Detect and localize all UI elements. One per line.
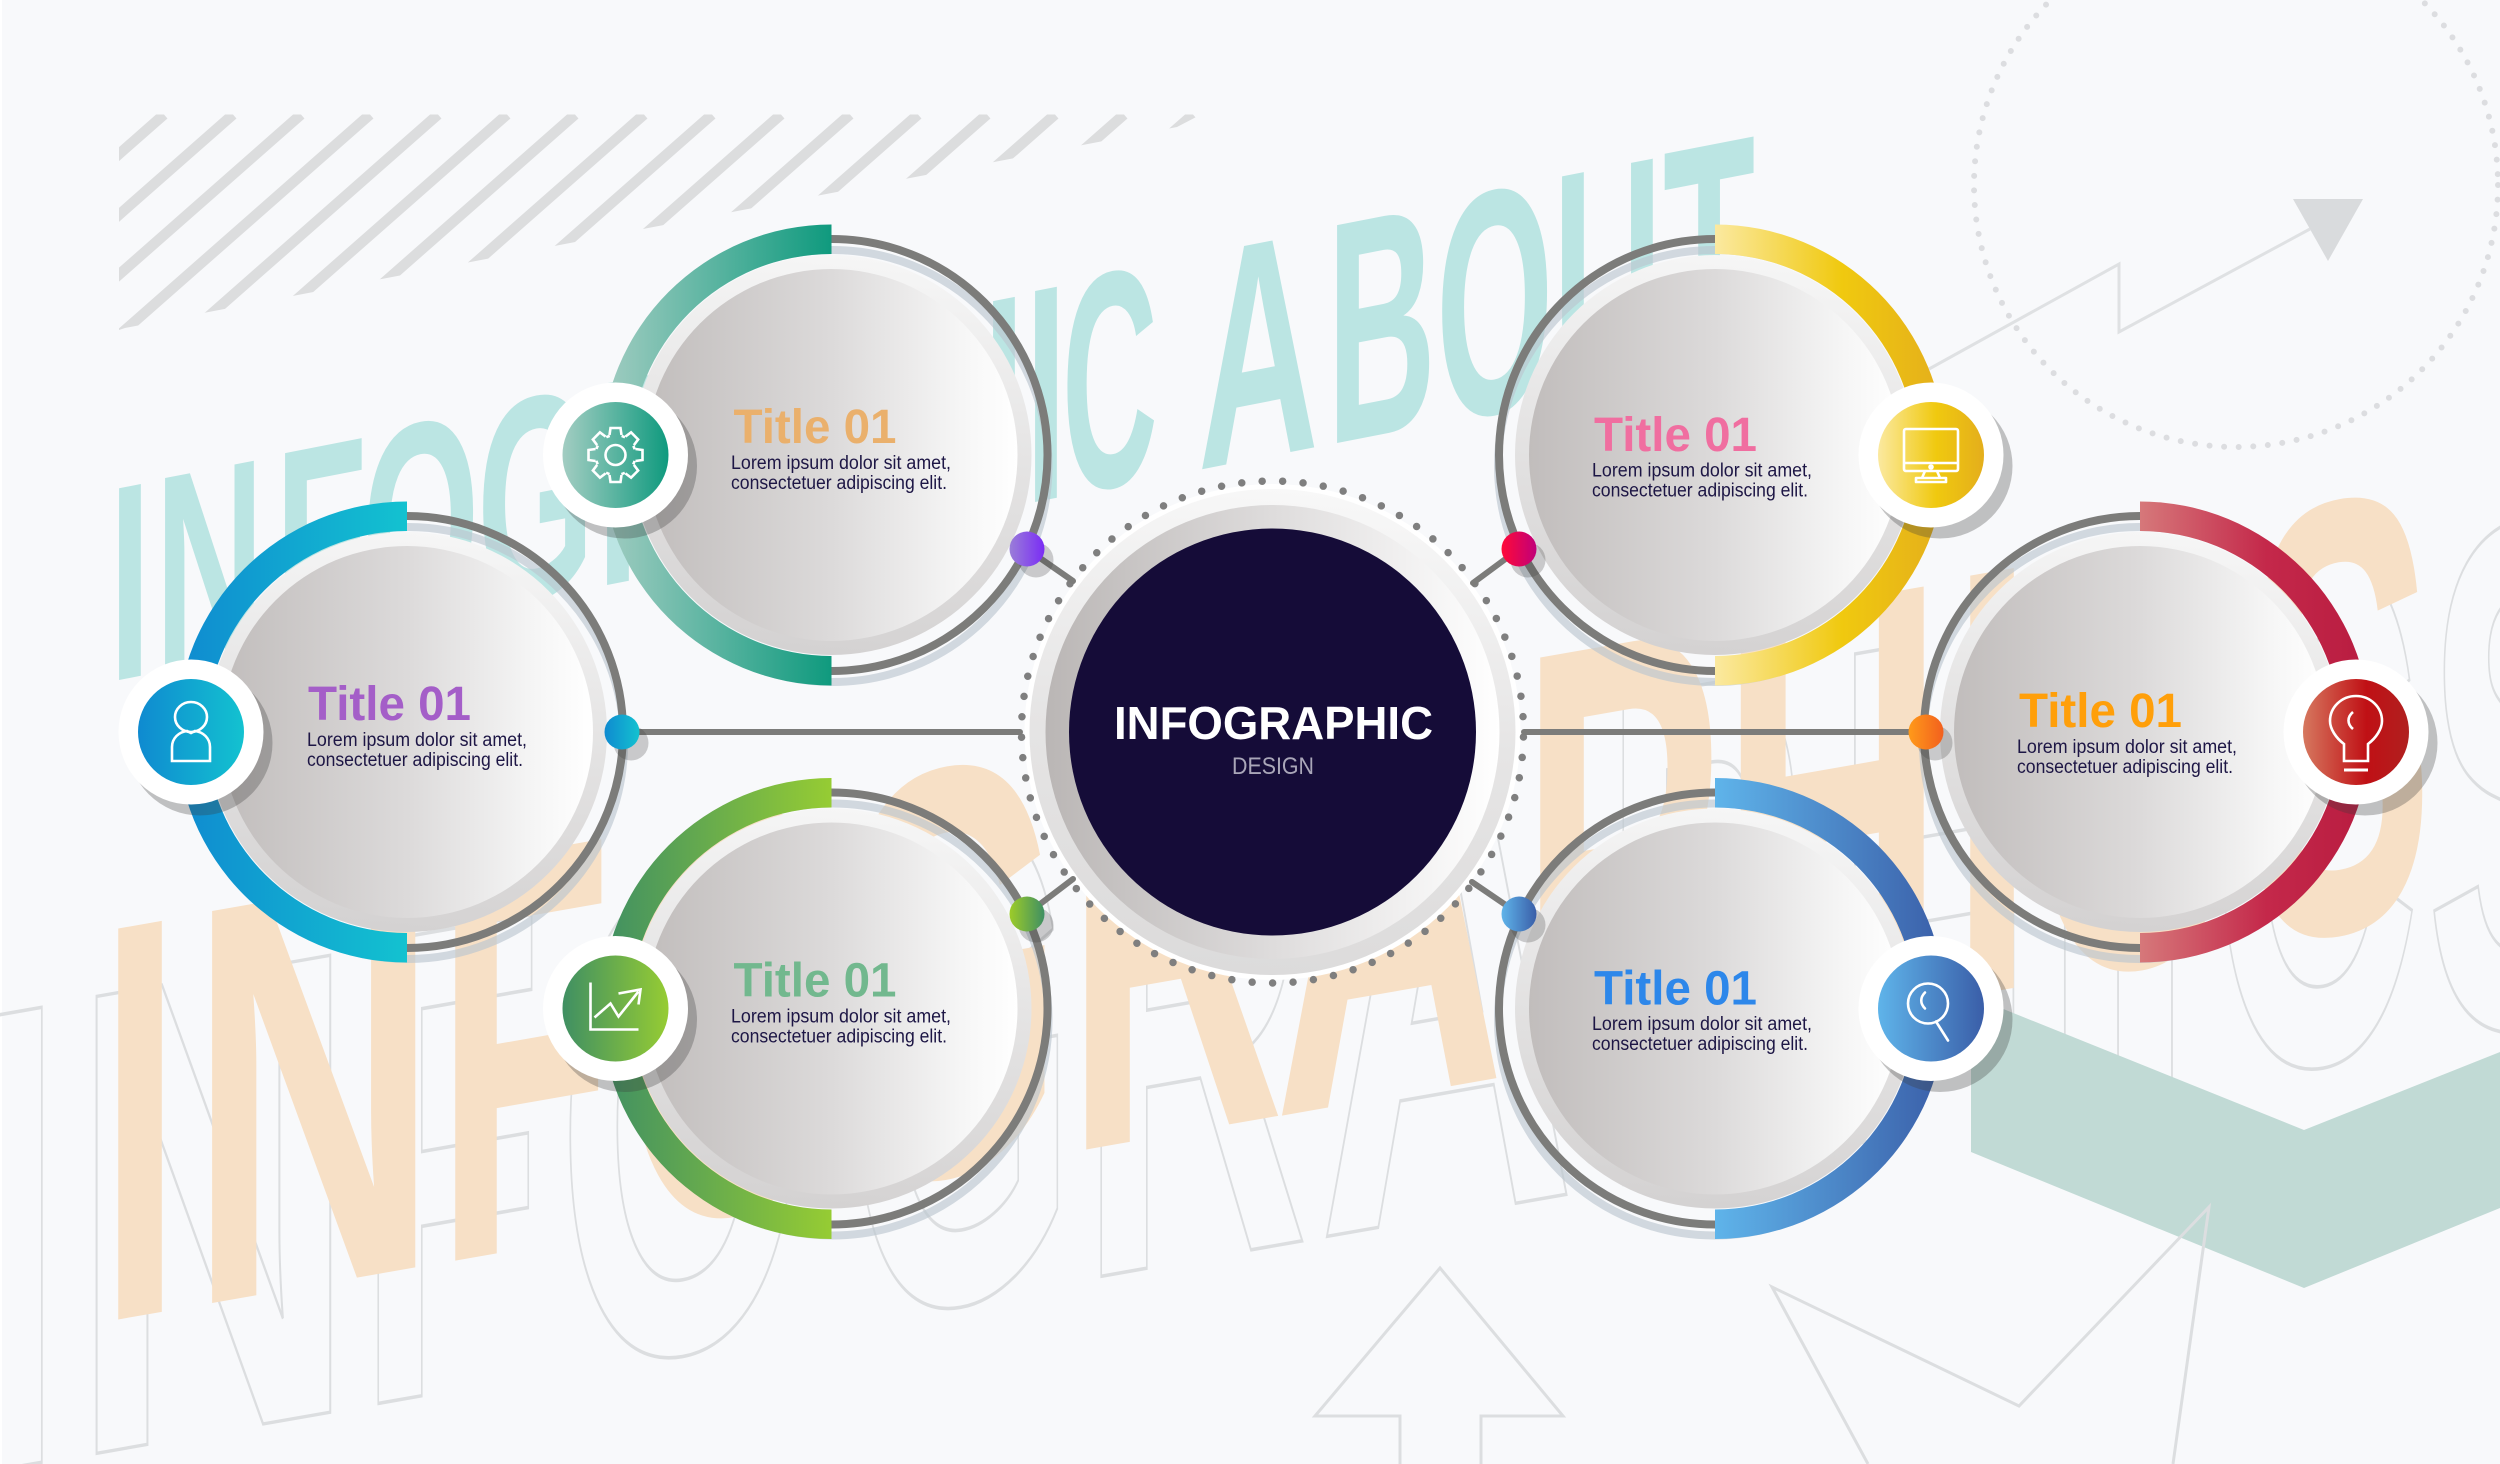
- connector node: person: [604, 714, 648, 760]
- background: up arrow outline: [1315, 1268, 1563, 1464]
- panel: centre hub: [1022, 481, 1524, 983]
- background: outlined word: G: [845, 662, 1076, 1464]
- body text: [1592, 1014, 1812, 1055]
- background: teal words: O: [362, 351, 479, 694]
- background: peach word: C: [2025, 393, 2243, 1115]
- background: zigzag arrow: [1929, 199, 2363, 369]
- icon: line chart: [543, 936, 697, 1092]
- hub subheading: DESIGN: [1232, 753, 1314, 780]
- body text: consectetuer adipiscing elit.: [731, 1026, 947, 1048]
- background: peach word: H: [1720, 453, 1945, 1168]
- body text: consectetuer adipiscing elit.: [1592, 480, 1808, 502]
- panel: bulb step: [1923, 502, 2438, 962]
- colored arc: [601, 224, 832, 686]
- background: peach word: P: [1520, 496, 1722, 1202]
- body text: consectetuer adipiscing elit.: [731, 473, 947, 494]
- heading: Title 01: [1594, 409, 1757, 462]
- body text: [2017, 737, 2237, 778]
- background: peach word: I: [1950, 433, 2034, 1129]
- heading: Title 01: [2019, 685, 2182, 738]
- heading: Title 01: [734, 401, 896, 454]
- background: teal words: A: [706, 276, 815, 630]
- body text: Lorem ipsum dolor sit amet,: [1592, 1014, 1812, 1035]
- background: teal words: A: [1198, 165, 1319, 537]
- icon: magnifier: [1858, 936, 2012, 1092]
- body text: Lorem ipsum dolor sit amet,: [307, 730, 527, 751]
- background: teal words: T: [1663, 67, 1755, 449]
- panel: person step: [118, 502, 624, 962]
- colored arc: [1715, 778, 1946, 1239]
- background: peach word: A: [1274, 539, 1505, 1244]
- background: outlined word: [0, 347, 2500, 1464]
- heading: Title 01: [1594, 962, 1757, 1016]
- icon: person: [118, 660, 272, 816]
- icon: gear: [543, 382, 697, 538]
- body text: consectetuer adipiscing elit.: [1592, 1034, 1808, 1055]
- background: green chevron: [1971, 996, 2500, 1288]
- hub inner ring: [1046, 505, 1500, 959]
- background: teal words: P: [815, 252, 916, 608]
- body text: Lorem ipsum dolor sit amet,: [1592, 460, 1812, 482]
- background: teal words: R: [597, 300, 706, 650]
- background: outlined word: P: [1603, 514, 1805, 1338]
- colored arc: [1715, 224, 1946, 686]
- hub dotted ring: [1022, 481, 1524, 983]
- hub outer ring: [1030, 489, 1516, 975]
- body text: [731, 453, 951, 494]
- background: peach word: I: [98, 794, 182, 1444]
- body text: Lorem ipsum dolor sit amet,: [2017, 737, 2237, 758]
- body text: [307, 730, 527, 771]
- background: outlined word: R: [1080, 615, 1309, 1427]
- background: outlined word: I: [2093, 432, 2197, 1255]
- icon: light bulb: [2284, 660, 2438, 816]
- body text: Lorem ipsum dolor sit amet,: [731, 453, 951, 474]
- body text: [1592, 460, 1812, 502]
- background: outlined word: H: [1831, 459, 2089, 1299]
- background: teal words: G: [477, 326, 594, 673]
- background: angular line: [1772, 1207, 2209, 1464]
- background: teal words: C: [1062, 200, 1158, 562]
- panel: gear step: [543, 224, 1048, 686]
- background: peach word: N: [189, 749, 439, 1429]
- colored arc: [176, 502, 407, 962]
- background: outlined word: A: [1318, 561, 1576, 1386]
- background: peach word: [98, 356, 2433, 1444]
- body text: [731, 1006, 951, 1048]
- connector node: chart: [1010, 896, 1054, 942]
- colored arc: [2140, 502, 2370, 962]
- panel: search step: [1498, 778, 2012, 1239]
- colored arc: [601, 778, 832, 1239]
- background: hatch stripes: [119, 114, 1196, 330]
- background: dotted circle: [1974, 0, 2498, 447]
- body text: Lorem ipsum dolor sit amet,: [731, 1006, 951, 1028]
- panel: chart step: [543, 778, 1048, 1239]
- background: peach word: S: [2245, 356, 2433, 1079]
- heading: Title 01: [308, 678, 471, 731]
- background: teal words: N: [155, 398, 264, 733]
- connector node: bulb: [1908, 714, 1952, 760]
- panel: monitor step: [1498, 224, 2012, 686]
- background: peach word: O: [618, 667, 853, 1356]
- hub navy disc: [1069, 528, 1476, 936]
- icon: monitor: [1858, 382, 2012, 538]
- connector node: search: [1502, 896, 1546, 942]
- background: teal words: F: [275, 377, 367, 711]
- background: teal words: I: [109, 421, 151, 741]
- background: teal words: B: [1327, 138, 1436, 512]
- connector node: monitor: [1502, 532, 1546, 578]
- background: teal words: H: [916, 229, 1025, 589]
- background: peach word: G: [828, 626, 1063, 1319]
- background: peach word: R: [1066, 580, 1284, 1278]
- background: peach word: F: [436, 713, 612, 1386]
- background: teal words: [109, 67, 1755, 741]
- heading: Title 01: [734, 954, 896, 1008]
- body text: consectetuer adipiscing elit.: [2017, 757, 2233, 778]
- background: teal words: O: [1436, 113, 1553, 493]
- background: teal words: U: [1553, 86, 1662, 470]
- connector lines: [622, 549, 1926, 914]
- body text: consectetuer adipiscing elit.: [307, 750, 523, 771]
- background: outlined word: C: [2210, 389, 2420, 1234]
- connector node: gear: [1010, 532, 1054, 578]
- hub heading: INFOGRAPHIC: [1114, 697, 1433, 749]
- background: teal words: I: [1025, 219, 1067, 570]
